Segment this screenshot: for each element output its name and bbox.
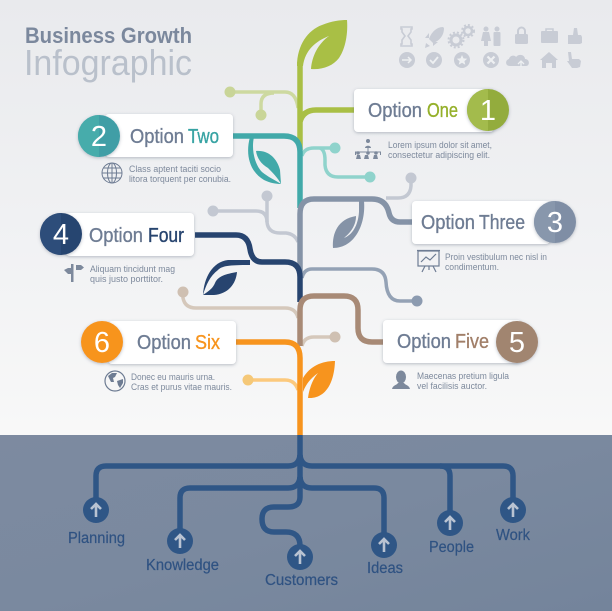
text: option three description: Proin vestibulum nec nisl in: [445, 252, 547, 262]
label: option one: Option: [368, 100, 422, 122]
label: ideas: Ideas: [367, 560, 403, 577]
label: customers: Customers: [265, 572, 338, 589]
icon: arrow circle: [399, 52, 415, 68]
icon: org chart: [356, 139, 380, 159]
badge: 1: [467, 89, 509, 131]
background: [0, 0, 612, 436]
brown branch: [300, 296, 383, 346]
shoot: light green: [224, 86, 298, 120]
icon: presentation board: [417, 250, 440, 272]
leaf: green: [297, 20, 347, 69]
root labels: [68, 527, 530, 589]
icon: house: [540, 52, 558, 68]
shoot: right slate: [302, 269, 422, 306]
icon: world globe: [105, 371, 125, 391]
roots: [96, 435, 513, 546]
icon: check circle: [426, 52, 442, 68]
text: option four description: Aliquam tincidunt mag: [90, 264, 175, 274]
label: option four: Option: [89, 225, 143, 247]
text: option two description: [102, 163, 231, 184]
text: option five description: Maecenas pretium ligula: [417, 371, 509, 381]
green stem and branch: [300, 62, 355, 150]
label: option three: [421, 212, 525, 234]
label: option one: [368, 100, 458, 122]
label: knowledge: Knowledge: [146, 557, 219, 574]
icon set: [399, 25, 582, 68]
badge: 1: 1: [480, 95, 496, 127]
icon: gears: [448, 25, 474, 48]
label: option five: Option: [397, 331, 451, 353]
icon: pointing hand: [567, 52, 581, 68]
node: work: [500, 497, 526, 523]
icon: cross circle: [483, 52, 499, 68]
root: people: [300, 455, 450, 513]
branches: thin side shoots: [178, 86, 422, 390]
shoot: right light grey: [386, 172, 416, 198]
shoot: light orange: [242, 374, 298, 390]
ground panel: [0, 435, 612, 611]
root: trunk: [262, 435, 300, 546]
icon: thumb up: [568, 28, 582, 44]
label: option six: Option: [137, 332, 191, 354]
shoot: left beige: [178, 286, 298, 318]
label: option three: Option: [421, 212, 475, 234]
node: planning: [83, 497, 109, 523]
label: option one: One: [427, 100, 458, 122]
text: option six description: Donec eu mauris urna.: [131, 372, 215, 382]
label: option five: Five: [455, 331, 489, 353]
badge: 6: 6: [94, 327, 110, 359]
node: ideas: [371, 532, 397, 558]
icon: cloud: [506, 55, 529, 67]
panel: option four: [40, 213, 194, 256]
navy branch: [195, 235, 300, 302]
text: option six description: Cras et purus vitae mauris.: [131, 382, 232, 392]
panel: option two: [78, 114, 233, 157]
heading: infographic: Infographic: [24, 42, 192, 83]
panel: option five: [383, 320, 538, 363]
label: option two: Option: [130, 126, 184, 148]
shoot: left light grey: [208, 190, 298, 242]
icon: briefcase: [541, 29, 558, 43]
root: work: [440, 466, 513, 500]
label: option four: [89, 225, 184, 247]
badge: 3: 3: [547, 207, 563, 239]
badge: 5: 5: [509, 327, 525, 359]
label: people: People: [429, 539, 474, 556]
root: planning: [96, 455, 300, 500]
icon: lock: [515, 28, 528, 44]
label: option three: Three: [479, 212, 525, 234]
panel: option one: [354, 89, 509, 132]
teal branch: [233, 136, 300, 208]
label: work: Work: [496, 527, 530, 544]
icon: hourglass: [401, 27, 412, 46]
icon: people: [481, 26, 500, 46]
text: option three description: condimentum.: [445, 262, 499, 272]
label: option two: [130, 126, 219, 148]
text: option one description: consectetur adipiscing elit.: [388, 150, 490, 160]
trunk and main branches: [195, 62, 412, 436]
text: option five description: vel facilisis auctor.: [417, 381, 487, 391]
text: option one description: Lorem ipsum dolor sit amet,: [388, 140, 492, 150]
badge: 2: 2: [91, 121, 107, 153]
node: customers: [287, 544, 313, 570]
shoot: light teal: [302, 142, 376, 182]
badge: 4: 4: [53, 219, 69, 251]
badge: 4: [40, 213, 82, 255]
node: people: [437, 510, 463, 536]
leaf: orange: [303, 361, 335, 398]
shoot: right beige: [302, 332, 340, 346]
root nodes: [83, 497, 526, 570]
leaf: navy: [203, 260, 250, 295]
badge: 2: [78, 115, 120, 157]
text: option four description: [64, 264, 175, 284]
root: knowledge: [180, 477, 300, 530]
badge: 3: [534, 201, 576, 243]
icon: star circle: [454, 52, 470, 68]
slate branch: [300, 199, 412, 272]
label: option five: [397, 331, 489, 353]
text: option five description: [392, 370, 509, 391]
panel: option six: [81, 321, 236, 364]
badge: 6: [81, 321, 123, 363]
icon: signpost: [64, 264, 84, 282]
leaf: teal: [248, 137, 281, 184]
label: planning: Planning: [68, 530, 125, 547]
leaf: slate: [333, 201, 364, 248]
heading: business growth: Business Growth: [25, 23, 192, 48]
icon: globe: [102, 163, 122, 183]
label: option four: Four: [148, 225, 184, 247]
badge: 5: [496, 321, 538, 363]
text: option four description: quis justo porttitor.: [90, 274, 163, 284]
node: knowledge: [167, 528, 193, 554]
text: option three description: [417, 250, 547, 272]
title: [24, 23, 192, 83]
icon: person: [392, 370, 410, 389]
icon: rocket: [425, 27, 444, 48]
text: option six description: [105, 371, 232, 392]
root: ideas: [300, 477, 384, 535]
text: option one description: [356, 139, 492, 160]
text: option two description: Class aptent taciti socio: [129, 164, 221, 174]
panel: option three: [412, 201, 576, 244]
orange branch: [236, 342, 300, 436]
label: option two: Two: [188, 126, 219, 148]
text: option two description: litora torquent per conubia.: [129, 174, 231, 184]
label: option six: Six: [195, 332, 220, 354]
